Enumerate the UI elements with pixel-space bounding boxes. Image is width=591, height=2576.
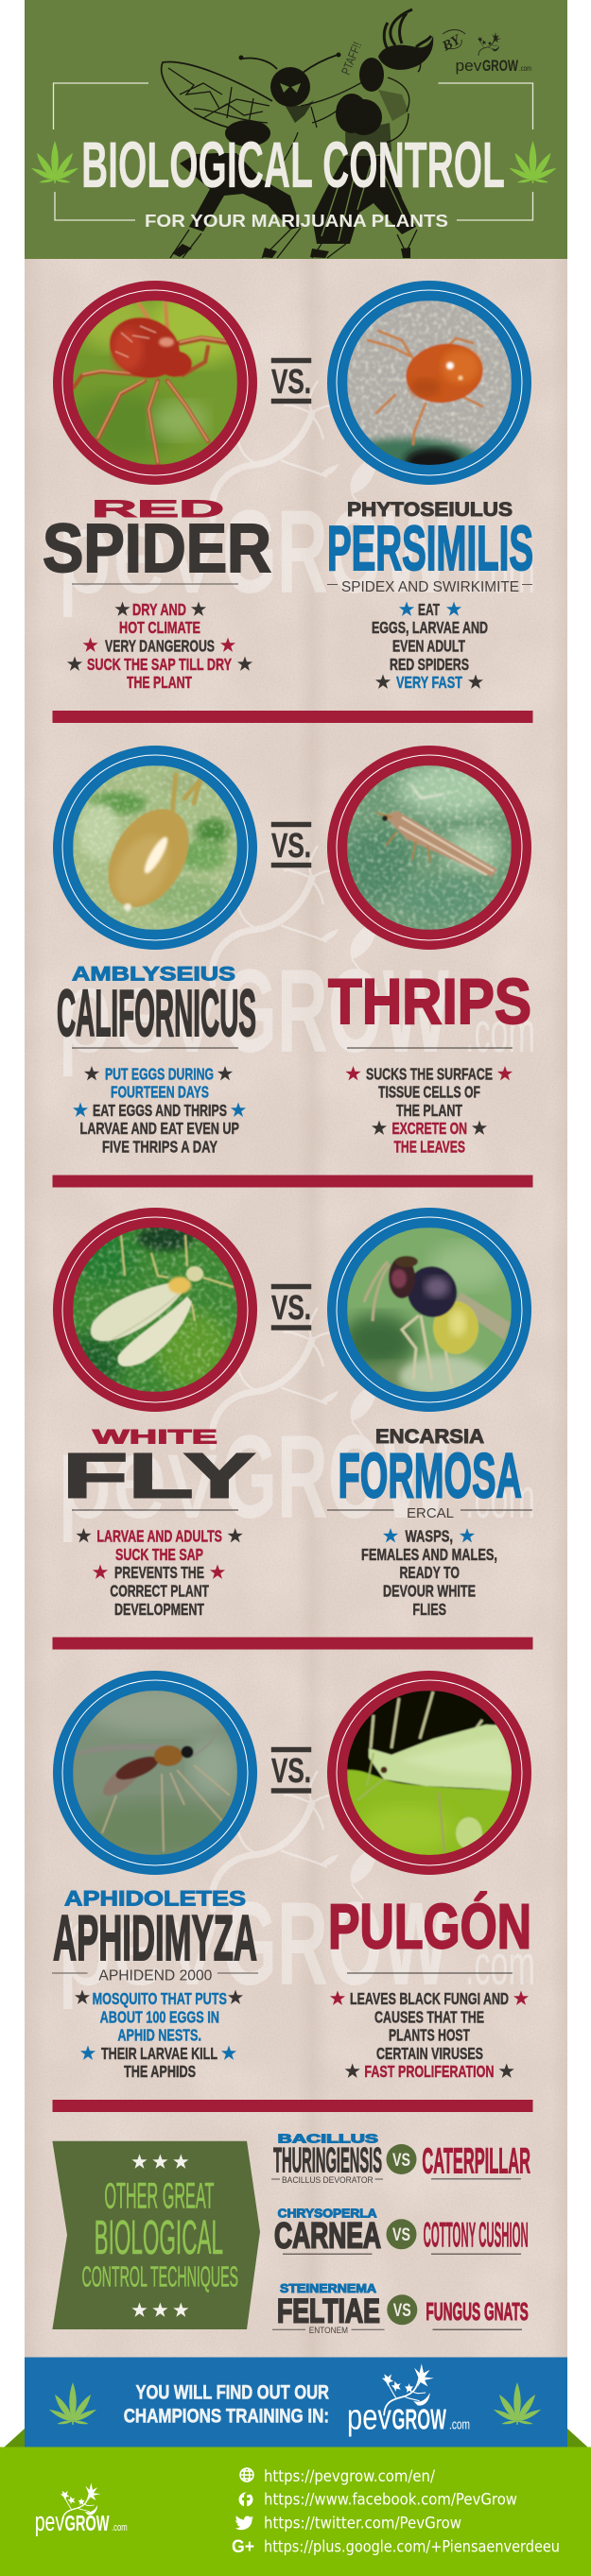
heading: aphidoletes aphidimyza <box>52 1886 258 1984</box>
facts: white fly: LARVAE AND ADULTS <box>96 1527 222 1546</box>
facts: pulgon <box>330 1989 529 2081</box>
vs badge: VS. <box>271 826 311 865</box>
vs badge: VS. <box>271 362 311 401</box>
persimilis photo circle <box>327 281 531 488</box>
divider bar <box>53 1637 533 1650</box>
link: facebook: https://www.facebook.com/PevGrow <box>264 2491 517 2510</box>
watermark <box>57 1771 535 2010</box>
matchup: thuringiensis vs caterpillar: BACILLUS <box>278 2132 378 2145</box>
icon: right cannabis leaf <box>508 141 558 183</box>
aphidoletes photo circle <box>53 1671 257 1875</box>
divider bar <box>53 711 533 723</box>
link: twitter: https://twitter.com/PevGrow <box>264 2514 461 2533</box>
boxing illustration: bee fighting a boxer: PTAFF!! <box>339 40 364 77</box>
facts: red spider: SUCK THE SAP TILL DRY <box>87 655 232 674</box>
vs badge: VS. <box>271 1288 311 1327</box>
facts: white fly: DEVELOPMENT <box>114 1600 204 1619</box>
heading: amblyseius californicus: AMBLYSEIUS <box>72 964 235 985</box>
icon: twitter <box>235 2516 253 2530</box>
facts: persimilis: RED SPIDERS <box>390 655 469 674</box>
watermark: .com <box>465 1933 535 1997</box>
panel: other great biological control techniques <box>52 2132 530 2335</box>
matchup: thuringiensis vs caterpillar: BACILLUS DEVORATOR <box>282 2175 374 2186</box>
facts: californicus: EAT EGGS AND THRIPS <box>93 1101 227 1120</box>
matchup: feltiae vs fungus gnats: FELTIAE <box>277 2293 380 2330</box>
link: website: https://pevgrow.com/en/ <box>264 2467 435 2486</box>
icon: google plus: G+ <box>232 2537 254 2557</box>
pulgon photo circle <box>327 1671 531 1875</box>
heading: encarsia formosa: ERCAL <box>407 1505 454 1521</box>
subtitle: FOR YOUR MARIJUANA PLANTS <box>145 211 448 231</box>
facts: white fly: SUCK THE SAP <box>115 1545 203 1564</box>
heading: thrips: THRIPS <box>328 966 531 1038</box>
matchup: feltiae vs fungus gnats: STEINERNEMA <box>280 2282 376 2295</box>
boxing illustration: bee fighting a boxer <box>162 9 433 258</box>
by pevgrow logo: GROW <box>482 57 519 75</box>
panel: champions training banner <box>4 2357 588 2447</box>
heading: red spider: RED <box>92 496 224 523</box>
heading: aphidoletes aphidimyza: APHIDIMYZA <box>53 1902 257 1974</box>
panel: red spider vs persimilis <box>43 281 535 723</box>
icon: globe <box>240 2468 253 2482</box>
header panel <box>25 0 567 259</box>
facts: red spider: DRY AND <box>132 600 186 619</box>
vs badge <box>271 1284 311 1331</box>
panel: amblyseius vs thrips <box>53 746 535 1187</box>
icon: left leaf <box>48 2382 97 2425</box>
facts: encarsia formosa: WASPS, <box>405 1527 453 1546</box>
green banner: BIOLOGICAL <box>95 2210 223 2264</box>
facts: thrips: THE LEAVES <box>393 1138 465 1157</box>
banner text: CHAMPIONS TRAINING IN: <box>124 2405 329 2427</box>
pevgrow logo white: pev <box>347 2398 391 2438</box>
heading: encarsia formosa <box>327 1426 532 1521</box>
watermark <box>57 381 535 618</box>
header green background <box>25 0 567 259</box>
facts: persimilis: EGGS, LARVAE AND <box>372 618 488 637</box>
facts: persimilis: EVEN ADULT <box>392 637 465 656</box>
facts: red spider: HOT CLIMATE <box>119 618 200 637</box>
green banner: OTHER GREAT <box>104 2177 214 2217</box>
banner text: YOU WILL FIND OUT OUR <box>136 2381 329 2403</box>
divider bar <box>53 1176 533 1187</box>
facts: aphidimyza: THEIR LARVAE KILL <box>101 2044 217 2063</box>
facts: encarsia formosa: DEVOUR WHITE <box>383 1582 476 1601</box>
by pevgrow logo: BY <box>439 32 464 55</box>
facts: white fly: CORRECT PLANT <box>110 1582 209 1601</box>
pevgrow logo footer: pev <box>35 2507 65 2537</box>
banner text <box>124 2381 329 2427</box>
by pevgrow logo: pev <box>456 57 482 75</box>
heading: encarsia formosa: ENCARSIA <box>375 1426 484 1448</box>
footer side folds <box>4 2429 588 2447</box>
watermark: pev <box>57 487 217 618</box>
facts: white fly <box>76 1527 243 1619</box>
matchup: thuringiensis vs caterpillar: VS <box>392 2151 410 2171</box>
facts: californicus: PUT EGGS DURING <box>105 1064 214 1083</box>
facts: aphidimyza: THE APHIDS <box>124 2062 196 2081</box>
facts: aphidimyza: MOSQUITO THAT PUTS <box>93 1989 227 2008</box>
by pevgrow logo <box>439 30 531 75</box>
bee eyes <box>280 83 301 93</box>
panel: amblyseius vs thrips: CALIFORNICUS <box>57 976 256 1050</box>
heading: phytoseiulus persimilis: SPIDEX AND SWIRKIMITE <box>341 579 519 595</box>
facts: aphidimyza: APHID NESTS. <box>117 2026 201 2045</box>
facts: thrips: TISSUE CELLS OF <box>378 1083 480 1102</box>
heading: red spider: SPIDER <box>43 511 271 587</box>
matchup: carnea vs cottony cushion: CHRYSOPERLA <box>278 2207 377 2221</box>
watermark: pev <box>57 1879 217 2010</box>
heading: aphidoletes aphidimyza: APHIDEND 2000 <box>98 1968 213 1984</box>
facts: californicus: FIVE THRIPS A DAY <box>102 1138 217 1157</box>
panel: footer links <box>0 2447 591 2576</box>
facts: californicus <box>73 1064 246 1157</box>
panel: white fly vs encarsia formosa <box>53 1208 535 1650</box>
facts: red spider: VERY DANGEROUS <box>105 637 215 656</box>
heading: phytoseiulus persimilis: PHYTOSEIULUS <box>347 498 513 521</box>
watermark: pev <box>57 1412 217 1543</box>
pevgrow logo footer: GROW <box>64 2511 110 2535</box>
vs badge <box>271 358 311 404</box>
matchup: carnea vs cottony cushion <box>274 2207 529 2256</box>
amblyseius photo circle <box>53 746 257 950</box>
facts: pulgon: LEAVES BLACK FUNGI AND <box>350 1989 509 2008</box>
facts: encarsia formosa <box>361 1527 497 1619</box>
watermark <box>57 846 535 1077</box>
facts: encarsia formosa: READY TO <box>399 1563 460 1582</box>
divider bar <box>53 2100 533 2112</box>
pevgrow logo footer <box>35 2482 128 2537</box>
pevgrow logo white <box>347 2363 470 2438</box>
icon: facebook <box>238 2493 253 2507</box>
facts: encarsia formosa: FLIES <box>412 1600 446 1619</box>
matchup: feltiae vs fungus gnats: VS <box>393 2301 411 2321</box>
facts: thrips: SUCKS THE SURFACE <box>366 1064 493 1083</box>
facts: californicus: FOURTEEN DAYS <box>111 1083 209 1102</box>
heading: amblyseius californicus <box>57 964 256 1050</box>
matchup: carnea vs cottony cushion: VS <box>392 2225 410 2245</box>
facts: californicus: LARVAE AND EAT EVEN UP <box>79 1119 239 1138</box>
watermark: .com <box>465 1467 535 1530</box>
facts: red spider <box>67 600 252 692</box>
matchup: carnea vs cottony cushion: CARNEA <box>274 2216 381 2256</box>
facts: encarsia formosa: FEMALES AND MALES, <box>361 1545 497 1564</box>
watermark: pev <box>57 946 217 1077</box>
facts: pulgon: PLANTS HOST <box>389 2026 470 2045</box>
green banner: CONTROL TECHNIQUES <box>81 2259 238 2293</box>
facts: aphidimyza <box>75 1989 243 2081</box>
matchup: thuringiensis vs caterpillar: THURINGIENSIS <box>273 2140 382 2179</box>
by pevgrow logo: .com <box>519 64 531 73</box>
facts: red spider: THE PLANT <box>127 673 192 692</box>
facts: thrips: EXCRETE ON <box>391 1119 467 1138</box>
facts: persimilis: VERY FAST <box>396 673 462 692</box>
panel: aphidoletes vs pulgon <box>52 1671 535 2112</box>
encarsia photo circle <box>327 1208 531 1412</box>
vs badge <box>271 822 311 867</box>
matchup: feltiae vs fungus gnats <box>272 2282 529 2335</box>
icon: right leaf <box>493 2382 542 2425</box>
facts: persimilis <box>372 600 488 692</box>
facts: pulgon: FAST PROLIFERATION <box>364 2062 494 2081</box>
pevgrow logo white: GROW <box>391 2403 446 2436</box>
thrips photo circle <box>327 746 531 950</box>
heading: aphidoletes aphidimyza: APHIDOLETES <box>64 1886 246 1911</box>
red spider photo circle <box>53 281 257 485</box>
pevgrow logo footer: .com <box>112 2522 128 2533</box>
facts: thrips: THE PLANT <box>396 1101 462 1120</box>
title frame <box>53 83 533 220</box>
facts: white fly: PREVENTS THE <box>114 1563 204 1582</box>
green banner <box>52 2141 260 2329</box>
heading: white fly: FLY <box>62 1440 255 1512</box>
facts: thrips <box>345 1064 513 1157</box>
facts: pulgon: CAUSES THAT THE <box>374 2007 484 2026</box>
watermark <box>57 1308 535 1543</box>
facts: aphidimyza: ABOUT 100 EGGS IN <box>100 2007 219 2026</box>
icon: left cannabis leaf <box>30 141 79 183</box>
facts: persimilis: EAT <box>418 600 440 619</box>
facts: pulgon: CERTAIN VIRUSES <box>376 2044 483 2063</box>
matchup: feltiae vs fungus gnats: ENTONEM <box>309 2326 348 2335</box>
vs badge <box>271 1747 311 1794</box>
vs badge: VS. <box>271 1751 311 1790</box>
white fly photo circle <box>53 1208 257 1412</box>
heading: white fly: WHITE <box>93 1425 217 1448</box>
pevgrow logo white: .com <box>449 2417 470 2433</box>
heading: phytoseiulus persimilis <box>327 498 533 595</box>
heading: white fly <box>62 1425 255 1512</box>
watermark: .com <box>465 541 535 605</box>
paper background <box>25 255 567 2362</box>
matchup: thuringiensis vs caterpillar <box>271 2132 530 2186</box>
watermark: .com <box>465 1001 535 1064</box>
